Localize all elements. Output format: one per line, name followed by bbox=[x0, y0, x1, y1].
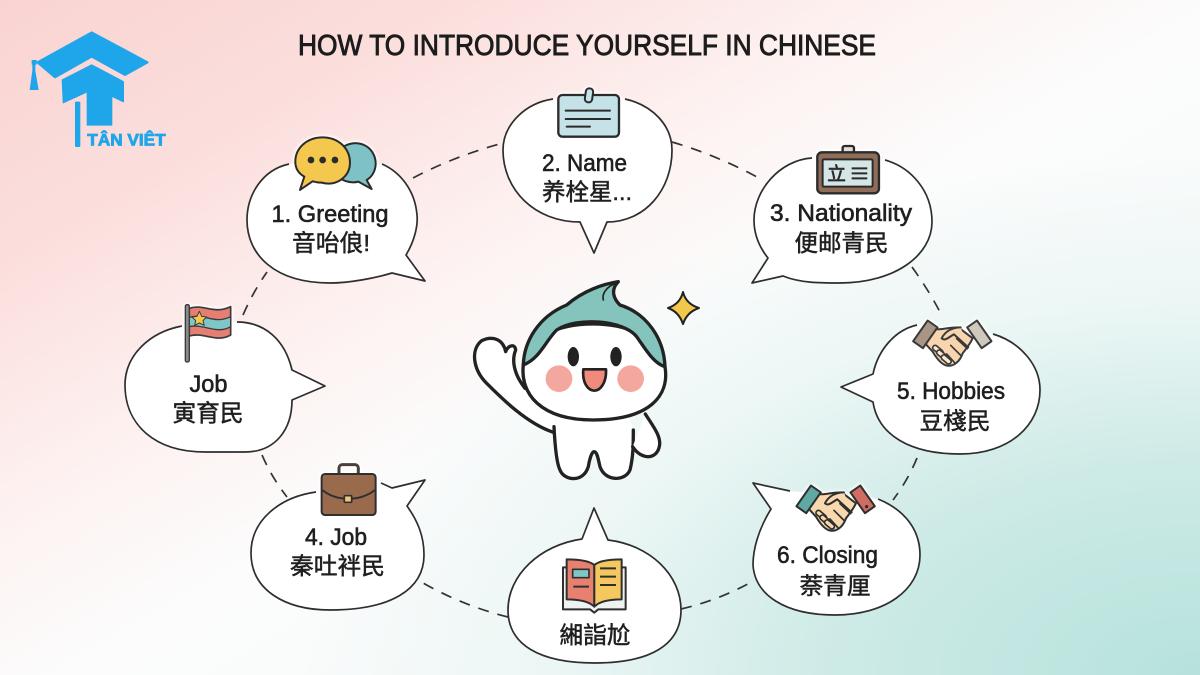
text: job 4: 秦吐袢民 bbox=[290, 553, 385, 579]
mascot right arm bbox=[633, 414, 660, 457]
text: nationality: 3. Nationality bbox=[770, 200, 912, 227]
icon: id badge: 立 bbox=[827, 160, 846, 187]
panel: book bbox=[508, 508, 681, 663]
text: greeting: 1. Greeting bbox=[272, 201, 388, 228]
icon: briefcase bbox=[322, 465, 376, 515]
panel: 6 Closing bbox=[753, 483, 920, 615]
text: book: 緗詣尬 bbox=[560, 622, 630, 648]
panel: 1 Greeting bbox=[247, 137, 425, 283]
text: job 4 bbox=[290, 524, 385, 579]
text: job bbox=[172, 371, 244, 426]
text: job 4: 4. Job bbox=[305, 524, 367, 551]
icon: handshake hobbies bbox=[913, 321, 991, 366]
icon: open book bbox=[563, 559, 626, 613]
icon: sparkle star bbox=[668, 292, 699, 324]
panel: 5 Hobbies bbox=[841, 321, 1040, 454]
text: closing bbox=[777, 542, 878, 599]
text: closing: 6. Closing bbox=[777, 542, 878, 569]
title: HOW TO INTRODUCE YOURSELF IN CHINESE bbox=[298, 30, 876, 62]
mascot bbox=[475, 282, 666, 479]
panel: Job (flag) bbox=[125, 305, 325, 452]
text: hobbies bbox=[897, 378, 1005, 434]
text: nationality: 便邮青民 bbox=[794, 230, 888, 256]
panel: 4 Job bbox=[251, 465, 425, 610]
connector ring: dashed lines bbox=[243, 142, 942, 617]
text: hobbies: 5. Hobbies bbox=[897, 378, 1005, 405]
mascot face bbox=[546, 347, 644, 392]
text: name: 2. Name bbox=[542, 150, 627, 177]
text: greeting bbox=[272, 201, 388, 256]
mascot left arm waving bbox=[475, 338, 555, 432]
panel: 3 Nationality bbox=[752, 146, 932, 283]
text: greeting: 音咍俍! bbox=[292, 230, 370, 256]
text: hobbies: 豆棧民 bbox=[920, 408, 990, 434]
text: job: 寅育民 bbox=[172, 400, 244, 426]
mascot hair bbox=[523, 282, 665, 367]
logo: Tan Viet: TÂN VIÊT bbox=[87, 131, 166, 150]
icon: id badge bbox=[817, 146, 879, 193]
text: name bbox=[542, 150, 632, 205]
mascot body bbox=[554, 410, 633, 479]
icon: flag bbox=[185, 305, 231, 362]
icon: speech bubbles bbox=[295, 137, 376, 190]
text: nationality bbox=[770, 200, 912, 256]
mascot head bbox=[523, 324, 666, 420]
text: job: Job bbox=[190, 371, 228, 398]
text: name: 养栓星... bbox=[542, 179, 632, 205]
panel: 2 Name bbox=[503, 88, 672, 253]
icon: handshake closing bbox=[796, 486, 875, 531]
logo: Tan Viet bbox=[30, 32, 166, 150]
text: closing: 萘青厘 bbox=[800, 573, 870, 599]
icon: name card bbox=[558, 88, 619, 137]
